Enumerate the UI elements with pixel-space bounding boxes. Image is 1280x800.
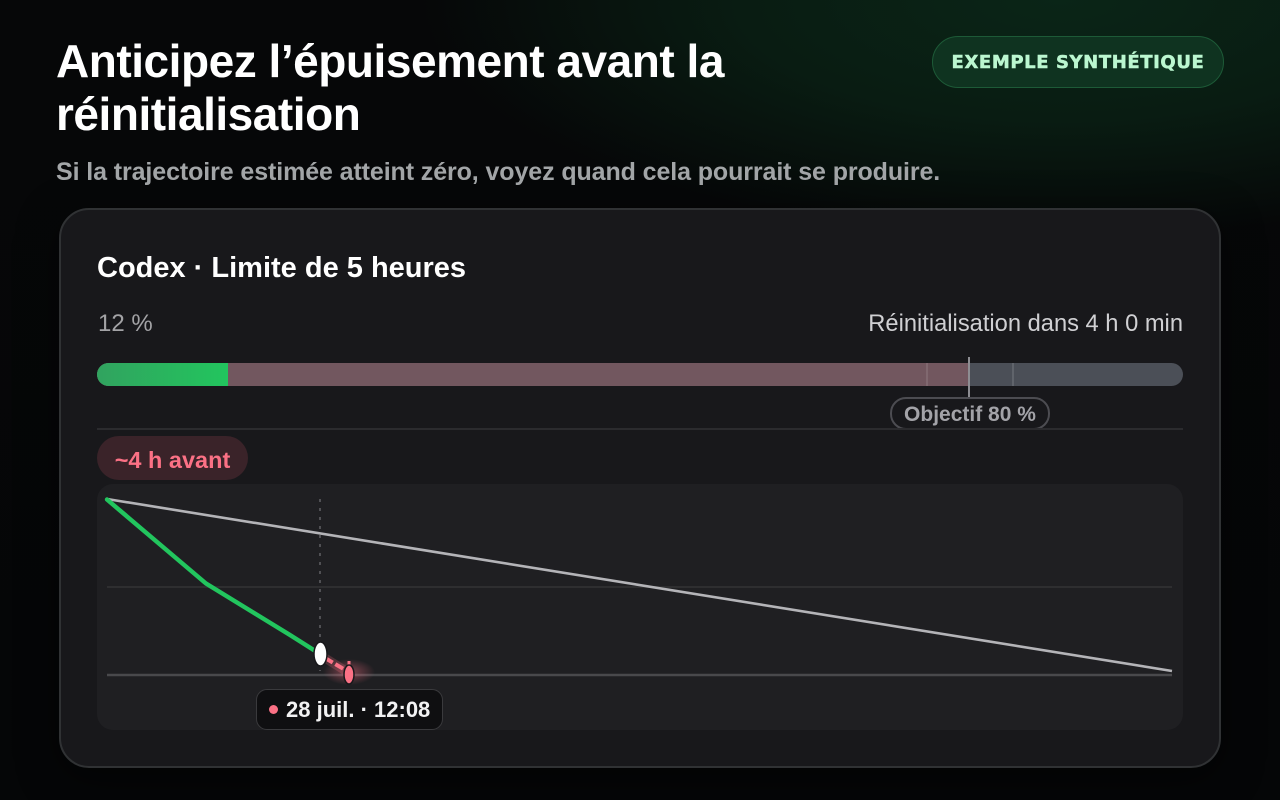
gridline (107, 586, 1172, 588)
tick 75 (926, 363, 928, 386)
title (56, 35, 725, 140)
subtitle: Si la trajectoire estimée atteint zéro, voyez quand cela pourrait se produire. (56, 158, 940, 186)
tooltip dot (269, 705, 278, 714)
now marker dotted line (319, 499, 321, 671)
depletion point nub (348, 661, 350, 667)
divider (97, 428, 1183, 430)
actual usage line (107, 500, 320, 654)
current point (314, 642, 327, 666)
depletion point glow (323, 659, 375, 685)
used segment (97, 363, 228, 386)
ideal pace line (107, 499, 1172, 671)
date tooltip (256, 689, 443, 730)
title: Anticipez l’épuisement avant la (56, 35, 724, 87)
progress bar (97, 363, 1183, 386)
projected usage segment (97, 363, 969, 386)
projected line (325, 658, 347, 671)
lead time badge: ~4 h avant (115, 447, 230, 473)
reset countdown: Réinitialisation dans 4 h 0 min (868, 311, 1183, 337)
tick 85 (1012, 363, 1014, 386)
chart panel (97, 484, 1183, 730)
tooltip date: 28 juil. · 12:08 (286, 697, 430, 722)
projected line glow (325, 658, 349, 673)
panel: codex limit card (59, 208, 1221, 768)
card heading: Codex · Limite de 5 heures (97, 252, 466, 284)
title: réinitialisation (56, 88, 360, 140)
target label: Objectif 80 % (904, 403, 1036, 426)
lead time badge (97, 436, 248, 480)
usage percentage: 12 % (98, 310, 153, 337)
target marker (968, 357, 970, 397)
depletion point (344, 665, 354, 684)
zero baseline (107, 674, 1172, 676)
badge: exemple synthétique: EXEMPLE SYNTHÉTIQUE (952, 52, 1204, 73)
badge: exemple synthétique (932, 36, 1224, 88)
target label (890, 397, 1050, 430)
